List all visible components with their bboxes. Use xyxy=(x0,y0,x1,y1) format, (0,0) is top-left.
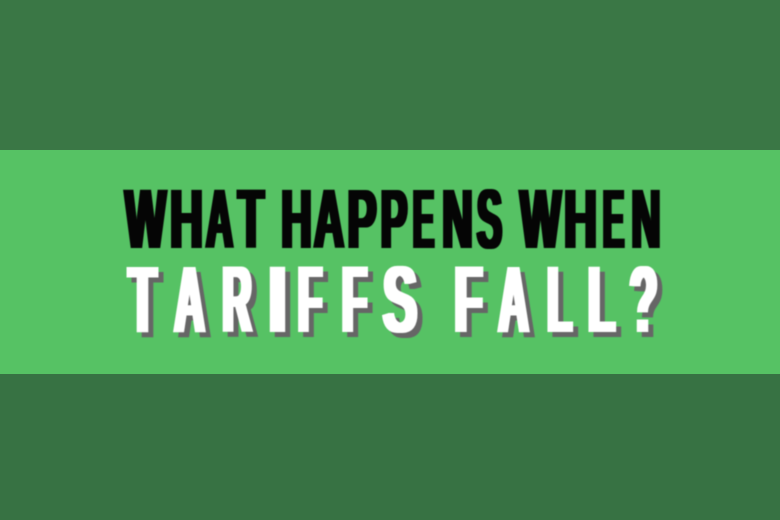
title: ? xyxy=(630,247,658,353)
heading line: TARIFFS FALL? with grey drop shadow: L xyxy=(588,247,615,353)
heading line: WHAT HAPPENS WHEN: W xyxy=(520,172,561,266)
heading line: WHAT HAPPENS WHEN: T xyxy=(238,172,264,266)
heading line: TARIFFS FALL? with grey drop shadow: T xyxy=(128,247,156,353)
heading line: WHAT HAPPENS WHEN: W xyxy=(125,172,166,266)
heading line: WHAT HAPPENS WHEN: P xyxy=(381,172,407,266)
text: N xyxy=(632,172,660,266)
panel: green title band xyxy=(0,150,780,374)
heading line: WHAT HAPPENS WHEN: E xyxy=(413,172,434,266)
heading line: WHAT HAPPENS WHEN: A xyxy=(314,172,344,266)
heading line: TARIFFS FALL? with grey drop shadow: R xyxy=(222,247,252,353)
heading line: WHAT HAPPENS WHEN: N xyxy=(442,172,473,266)
heading line: TARIFFS FALL? with grey drop shadow: S xyxy=(383,247,417,353)
heading line: TARIFFS FALL? with grey drop shadow: F xyxy=(342,247,367,353)
heading line: WHAT HAPPENS WHEN: H xyxy=(170,172,203,266)
heading line: WHAT HAPPENS WHEN: A xyxy=(206,172,233,266)
heading line: TARIFFS FALL? with grey drop shadow: I xyxy=(268,247,288,353)
heading line: TARIFFS FALL? with grey drop shadow: F xyxy=(298,247,322,353)
heading line: WHAT HAPPENS WHEN: H xyxy=(281,172,312,266)
heading line: WHAT HAPPENS WHEN: H xyxy=(564,172,597,266)
heading line: WHAT HAPPENS WHEN xyxy=(125,172,660,266)
heading line: TARIFFS FALL? with grey drop shadow: F xyxy=(454,247,482,353)
heading line: TARIFFS FALL? with grey drop shadow xyxy=(128,247,658,353)
title xyxy=(125,172,660,353)
heading line: WHAT HAPPENS WHEN: S xyxy=(477,172,502,266)
heading line: TARIFFS FALL? with grey drop shadow: L xyxy=(547,247,572,353)
heading line: WHAT HAPPENS WHEN: E xyxy=(603,172,624,266)
heading line: TARIFFS FALL? with grey drop shadow: A xyxy=(174,247,204,353)
heading line: TARIFFS FALL? with grey drop shadow: A xyxy=(498,247,528,353)
heading line: WHAT HAPPENS WHEN: P xyxy=(348,172,376,266)
